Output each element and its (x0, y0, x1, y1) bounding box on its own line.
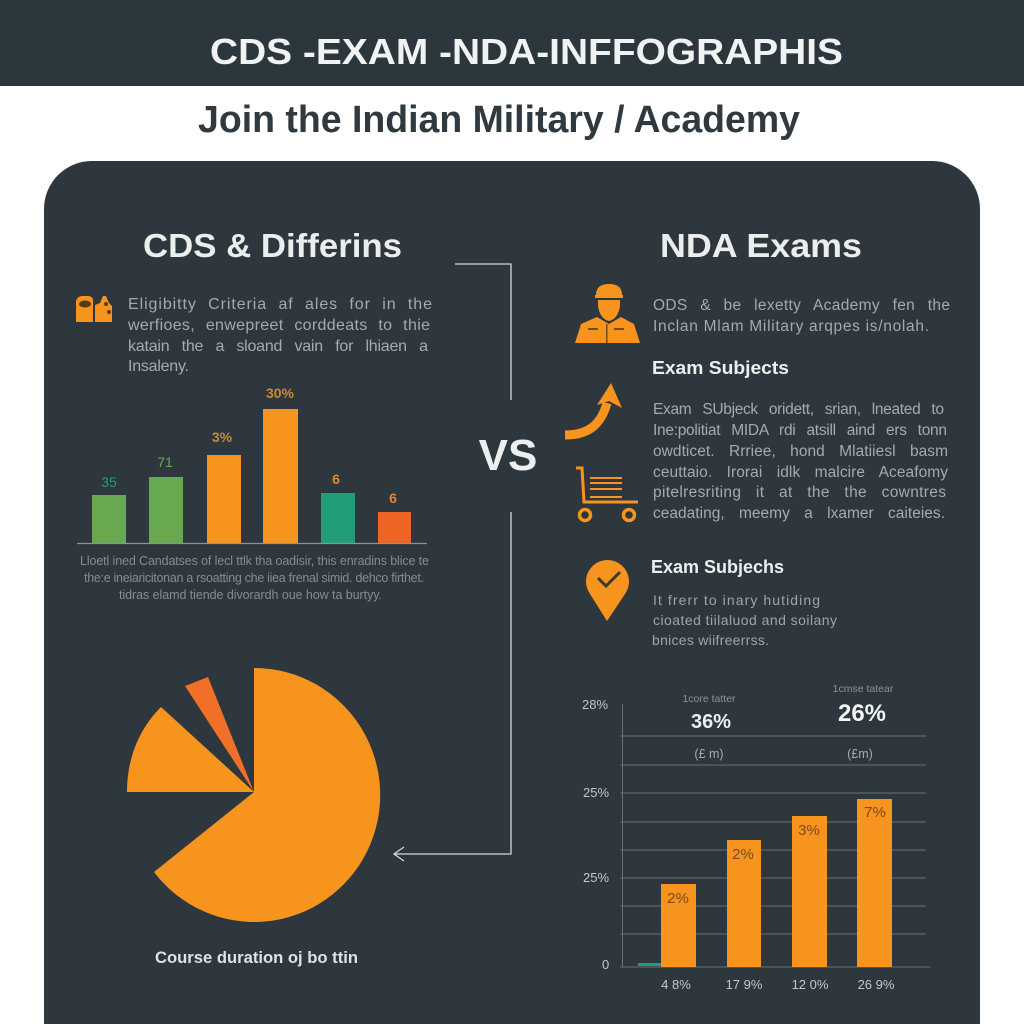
heading: CDS: CDS & Differins (143, 227, 402, 264)
bar chart: course: 3% (798, 822, 820, 839)
text block: intro (653, 297, 950, 335)
title: CDS -EXAM -NDA-INFFOGRAPHIS (210, 31, 843, 72)
callout: 36%: 36% (691, 711, 731, 733)
connector arrow (394, 264, 511, 861)
text block: exam subjects 1: Ine:politiat MIDA rdi atsill aind ers tonn (653, 422, 947, 439)
text block: eligibility: Eligibitty Criteria af ales for in the (128, 296, 432, 313)
icon: rising arrow (565, 383, 622, 435)
callout: 36%: 1core tatter (682, 693, 736, 705)
bar chart: course: 25% (583, 785, 609, 800)
bar chart: course: 12 0% (792, 977, 829, 992)
text block: intro: ODS & be lexetty Academy fen the (653, 297, 950, 314)
text block: exam subjects 1: ceadating, meemy a lxamer caiteies. (653, 505, 945, 522)
VS label: VS (479, 431, 537, 480)
bar chart: course: 0 (602, 957, 609, 972)
bar chart: course: 28% (582, 697, 608, 712)
bar chart: course (582, 683, 930, 992)
bar chart: course: 2% (667, 890, 689, 907)
heading: exam subjects 2: Exam Subjechs (651, 557, 784, 577)
bar chart: course: 26 9% (858, 977, 895, 992)
text block: exam subjects 1: Exam SUbjeck oridett, srian, lneated to (653, 401, 944, 418)
callout: 26%: 1cmse tatear (833, 683, 894, 695)
text block: exam subjects 2 (652, 592, 837, 648)
bar chart: eligibility: 6 (389, 490, 397, 506)
callout: 26% (833, 683, 894, 761)
subtitle: Join the Indian Military / Academy (198, 99, 800, 141)
text block: exam subjects 2: It frerr to inary hutiding (653, 592, 820, 608)
text block: exam subjects 1: owdticet. Rrriee, hond Mlatiiesl basm (653, 443, 948, 460)
callout: 36%: (£ m) (694, 747, 724, 761)
bar chart: course: 17 9% (726, 977, 763, 992)
callout: 26%: (£m) (847, 747, 873, 761)
bar chart: eligibility: 71 (157, 454, 173, 470)
heading: NDA: NDA Exams (660, 227, 862, 264)
text block: exam subjects 1: pitelresriting it at the the cowntres (653, 484, 946, 501)
bar chart: course: 7% (864, 804, 886, 821)
bar chart: eligibility: 6 (332, 471, 340, 487)
panel: CDS column (76, 227, 432, 967)
text block: eligibility (127, 296, 432, 375)
caption: course duration: Course duration oj bo ttin (155, 949, 358, 967)
caption: bar chart: Lloetl ined Candatses of lecl ttlk tha oadisir, this enradins blice te (80, 554, 429, 568)
bar chart: eligibility: 35 (101, 474, 117, 490)
bar chart: course: 2% (732, 846, 754, 863)
callout: 36% (682, 693, 736, 761)
icon: eligibility badge (76, 296, 112, 322)
text block: exam subjects 1 (653, 401, 948, 522)
text block: eligibility: katain the a sloand vain for lhiaen a (128, 338, 428, 355)
main panel (44, 161, 980, 1024)
text block: eligibility: Insaleny. (128, 358, 189, 375)
header bar (0, 0, 1024, 86)
bar chart: course: 4 8% (661, 977, 691, 992)
text block: exam subjects 1: ceuttaio. Irorai idlk malcire Aceafomy (653, 464, 948, 481)
callout: 26%: 26% (838, 700, 886, 727)
text block: eligibility: werfioes, enwepreet corddeats to thie (127, 317, 430, 334)
caption: bar chart: the:e ineiaricitonan a rsoatting che iiea frenal simid. dehco firthet. (84, 571, 424, 585)
bar chart: eligibility: 30% (266, 385, 295, 401)
caption: bar chart (80, 554, 429, 602)
heading: exam subjects 1: Exam Subjects (652, 358, 789, 378)
text block: exam subjects 2: bnices wiifreerrss. (652, 632, 769, 648)
icon: soldier (575, 284, 640, 343)
bar chart: eligibility (77, 385, 427, 544)
bar chart: eligibility: 3% (212, 429, 233, 445)
text block: intro: Inclan Mlam Military arqpes is/nolah. (653, 318, 929, 335)
icon: cart (576, 468, 638, 520)
caption: bar chart: tidras elamd tiende divorardh oue how ta burtyy. (119, 588, 382, 602)
panel: NDA column (565, 227, 950, 992)
icon: location check (586, 560, 629, 621)
bar chart: course: 25% (583, 870, 609, 885)
text block: exam subjects 2: cioated tiilaluod and soilany (653, 612, 837, 628)
pie chart (127, 668, 380, 922)
